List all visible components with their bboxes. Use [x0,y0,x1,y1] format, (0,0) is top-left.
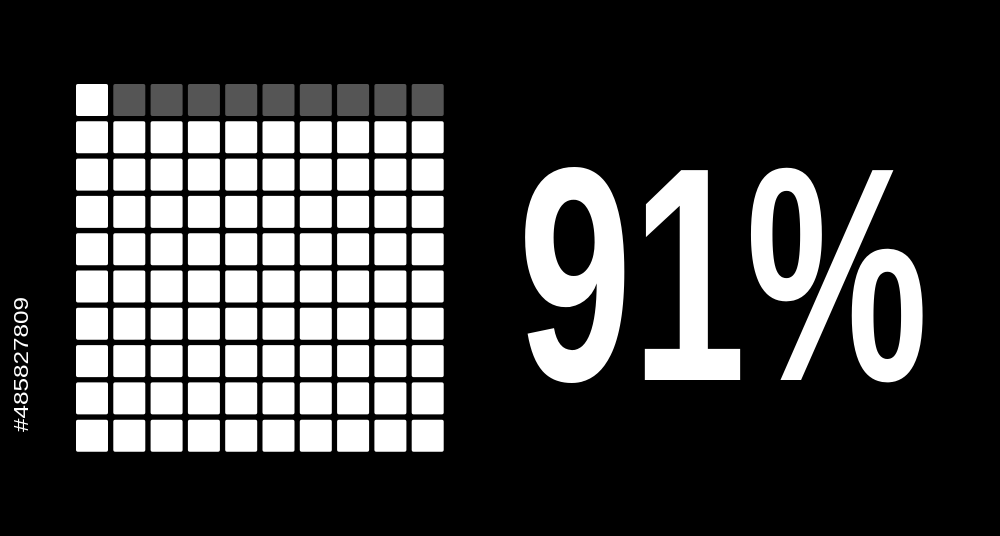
vertical stock id: #485827809 [11,297,33,432]
waffle chart: 91 of 100 filled [76,84,444,452]
